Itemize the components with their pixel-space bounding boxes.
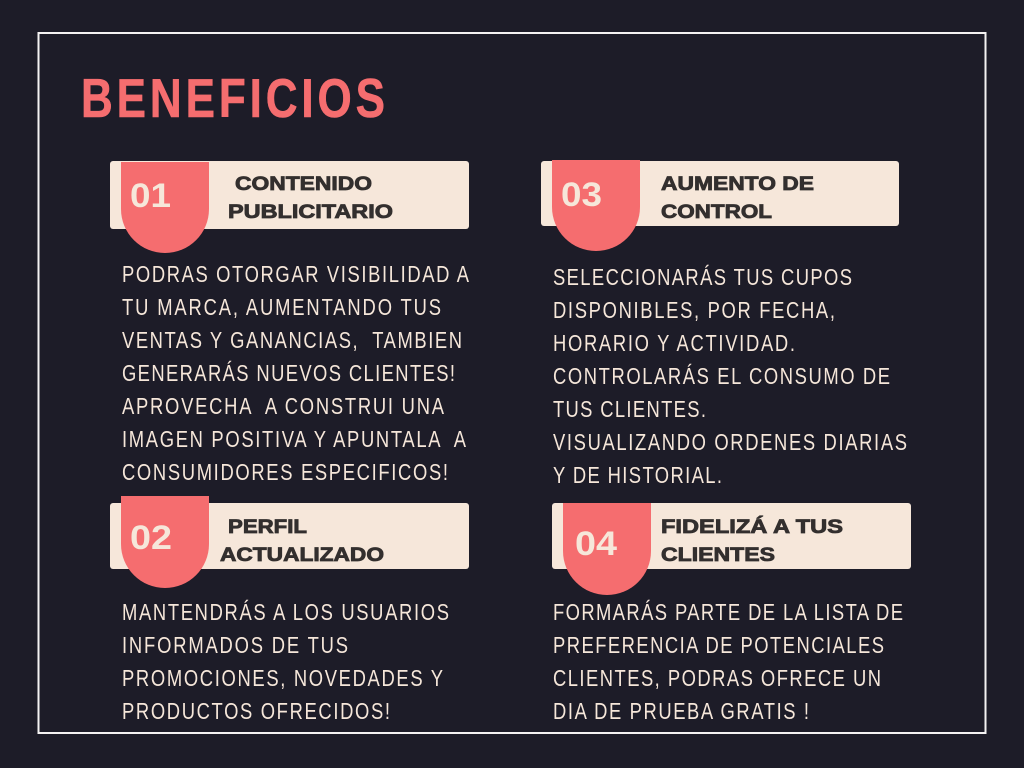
panel: benefit 02 — [110, 496, 469, 725]
body text 01: PODRAS OTORGAR VISIBILIDAD A — [122, 262, 469, 288]
number 03: 03 — [561, 176, 602, 214]
body text 03: TUS CLIENTES. — [553, 397, 706, 423]
body text 01 — [122, 262, 469, 486]
header bar 01 — [110, 161, 469, 229]
body text 02: PROMOCIONES, NOVEDADES Y — [122, 666, 443, 692]
body text 03: HORARIO Y ACTIVIDAD. — [553, 331, 795, 357]
heading 01: PUBLICITARIO — [228, 202, 393, 223]
body text 03: CONTROLARÁS EL CONSUMO DE — [553, 364, 890, 390]
panel: benefit 01 — [110, 161, 469, 486]
heading 02: PERFIL — [228, 517, 307, 538]
body text 04: PREFERENCIA DE POTENCIALES — [553, 633, 884, 659]
body text 03: SELECCIONARÁS TUS CUPOS — [553, 265, 852, 291]
body text 04 — [553, 600, 903, 725]
panel: benefit 03 — [541, 160, 907, 489]
heading 04 — [661, 516, 843, 566]
body text 03 — [553, 265, 907, 489]
body text 03: DISPONIBLES, POR FECHA, — [553, 298, 835, 324]
panel: benefit 04 — [552, 503, 911, 725]
heading 03: AUMENTO DE — [661, 174, 814, 195]
number badge 01 — [121, 162, 209, 253]
body text 01: IMAGEN POSITIVA Y APUNTALA A — [122, 427, 466, 453]
body text 04: DIA DE PRUEBA GRATIS ! — [553, 699, 809, 725]
header bar 04 — [552, 503, 911, 569]
body text 02: INFORMADOS DE TUS — [122, 633, 348, 659]
heading 02 — [220, 517, 384, 566]
body text 01: TU MARCA, AUMENTANDO TUS — [122, 295, 441, 321]
title: BENEFICIOS — [81, 67, 385, 129]
body text 01: CONSUMIDORES ESPECIFICOS! — [122, 460, 448, 486]
number badge 04 — [563, 503, 651, 595]
heading 03: CONTROL — [661, 202, 772, 223]
heading 02: ACTUALIZADO — [220, 545, 384, 566]
heading 04: FIDELIZÁ A TUS — [661, 516, 843, 538]
header bar 03 — [541, 161, 899, 226]
body text 02: MANTENDRÁS A LOS USUARIOS — [122, 600, 449, 626]
body text 01: APROVECHA A CONSTRUI UNA — [122, 394, 444, 420]
body text 03: VISUALIZANDO ORDENES DIARIAS — [553, 430, 907, 456]
heading 01: CONTENIDO — [235, 174, 372, 195]
body text 01: GENERARÁS NUEVOS CLIENTES! — [122, 361, 455, 387]
body text 01: VENTAS Y GANANCIAS, TAMBIEN — [122, 328, 462, 354]
number badge 02 — [121, 496, 209, 588]
body text 04: FORMARÁS PARTE DE LA LISTA DE — [553, 600, 903, 626]
header bar 02 — [110, 503, 469, 569]
number 01: 01 — [130, 177, 171, 215]
body text 02 — [122, 600, 449, 725]
number badge 03 — [552, 160, 640, 251]
body text 04: CLIENTES, PODRAS OFRECE UN — [553, 666, 881, 692]
body text 03: Y DE HISTORIAL. — [553, 463, 722, 489]
number 04: 04 — [575, 525, 617, 563]
body text 02: PRODUCTOS OFRECIDOS! — [122, 699, 390, 725]
heading 03 — [661, 174, 814, 223]
number 02: 02 — [130, 519, 172, 557]
heading 04: CLIENTES — [661, 545, 775, 566]
heading 01 — [228, 174, 393, 223]
